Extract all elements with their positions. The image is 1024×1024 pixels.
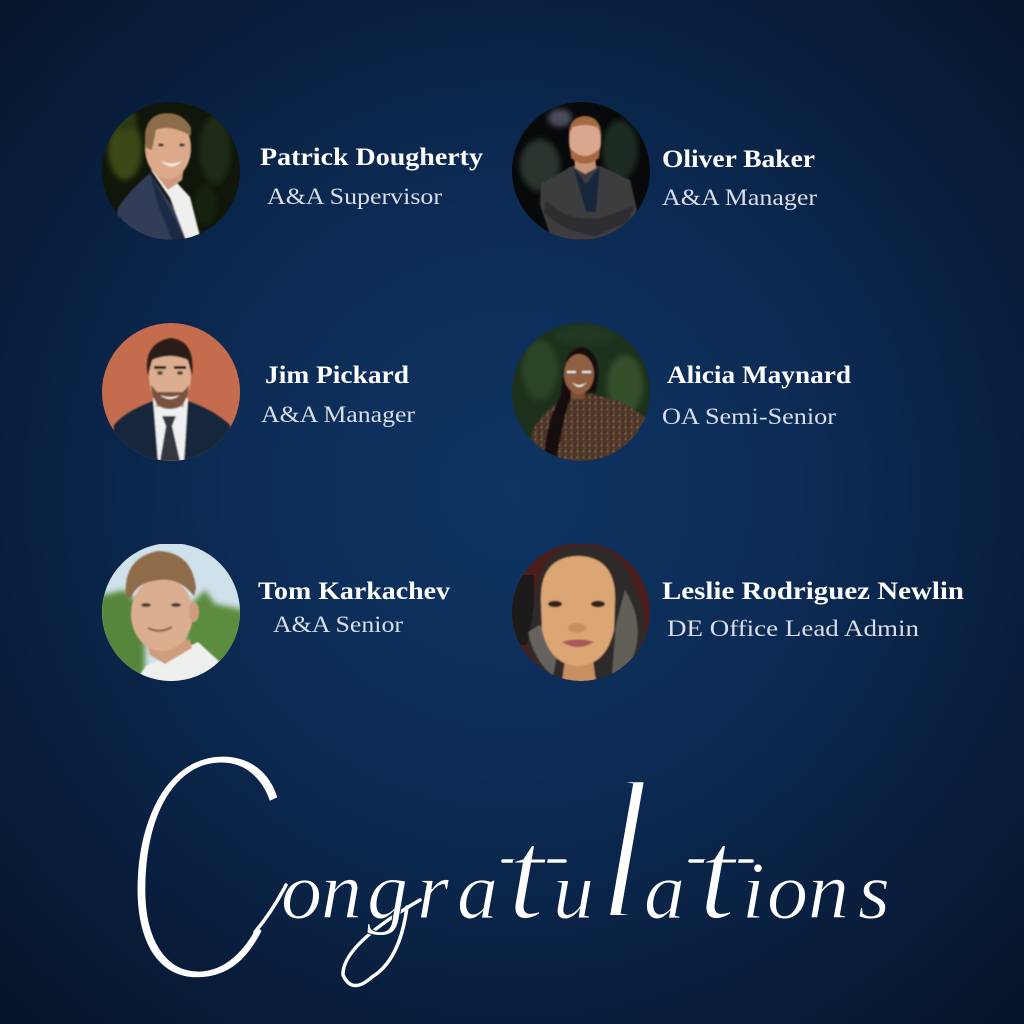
role: A&A Manager <box>261 402 415 428</box>
card: Alicia Maynard <box>512 323 851 461</box>
portrait: Patrick Dougherty <box>102 102 240 240</box>
lowercase letters: r <box>417 845 450 936</box>
portrait: Leslie Rodriguez Newlin <box>512 544 650 682</box>
lowercase letters: s <box>858 845 890 936</box>
name: Tom Karkachev <box>258 578 451 605</box>
name: Oliver Baker <box>662 146 815 173</box>
card: Oliver Baker <box>512 102 817 240</box>
role: A&A Supervisor <box>267 184 442 210</box>
portrait: Tom Karkachev <box>102 544 240 681</box>
name: Jim Pickard <box>265 362 409 389</box>
role: OA Semi-Senior <box>662 404 836 430</box>
portrait: Oliver Baker <box>512 102 650 240</box>
role: A&A Manager <box>662 185 817 211</box>
lowercase letters: g <box>367 845 408 936</box>
lowercase letters: u <box>553 845 594 936</box>
flourishes <box>255 861 752 986</box>
lowercase letters: n <box>808 845 849 936</box>
card: Tom Karkachev <box>98 544 451 690</box>
lowercase letters: a <box>457 845 498 936</box>
portrait: Jim Pickard <box>102 323 240 461</box>
lowercase letters: o <box>767 845 808 936</box>
role: DE Office Lead Admin <box>667 616 919 642</box>
lowercase letters: i <box>742 845 765 936</box>
lowercase letters: n <box>321 845 362 936</box>
name: Alicia Maynard <box>667 362 851 389</box>
lowercase letters: t <box>699 803 738 947</box>
name: Patrick Dougherty <box>260 144 484 171</box>
lowercase letters: o <box>281 845 322 936</box>
card: Jim Pickard <box>102 323 415 461</box>
portrait: Alicia Maynard <box>512 323 650 461</box>
card: Leslie Rodriguez Newlin <box>512 544 964 682</box>
name: Leslie Rodriguez Newlin <box>662 578 964 605</box>
card: Patrick Dougherty <box>102 102 484 240</box>
lowercase letters: l <box>596 741 652 962</box>
role: A&A Senior <box>273 612 403 638</box>
lowercase letters: a <box>644 845 685 936</box>
lowercase letters: t <box>508 803 547 947</box>
heading: Congratulations <box>118 676 890 1024</box>
